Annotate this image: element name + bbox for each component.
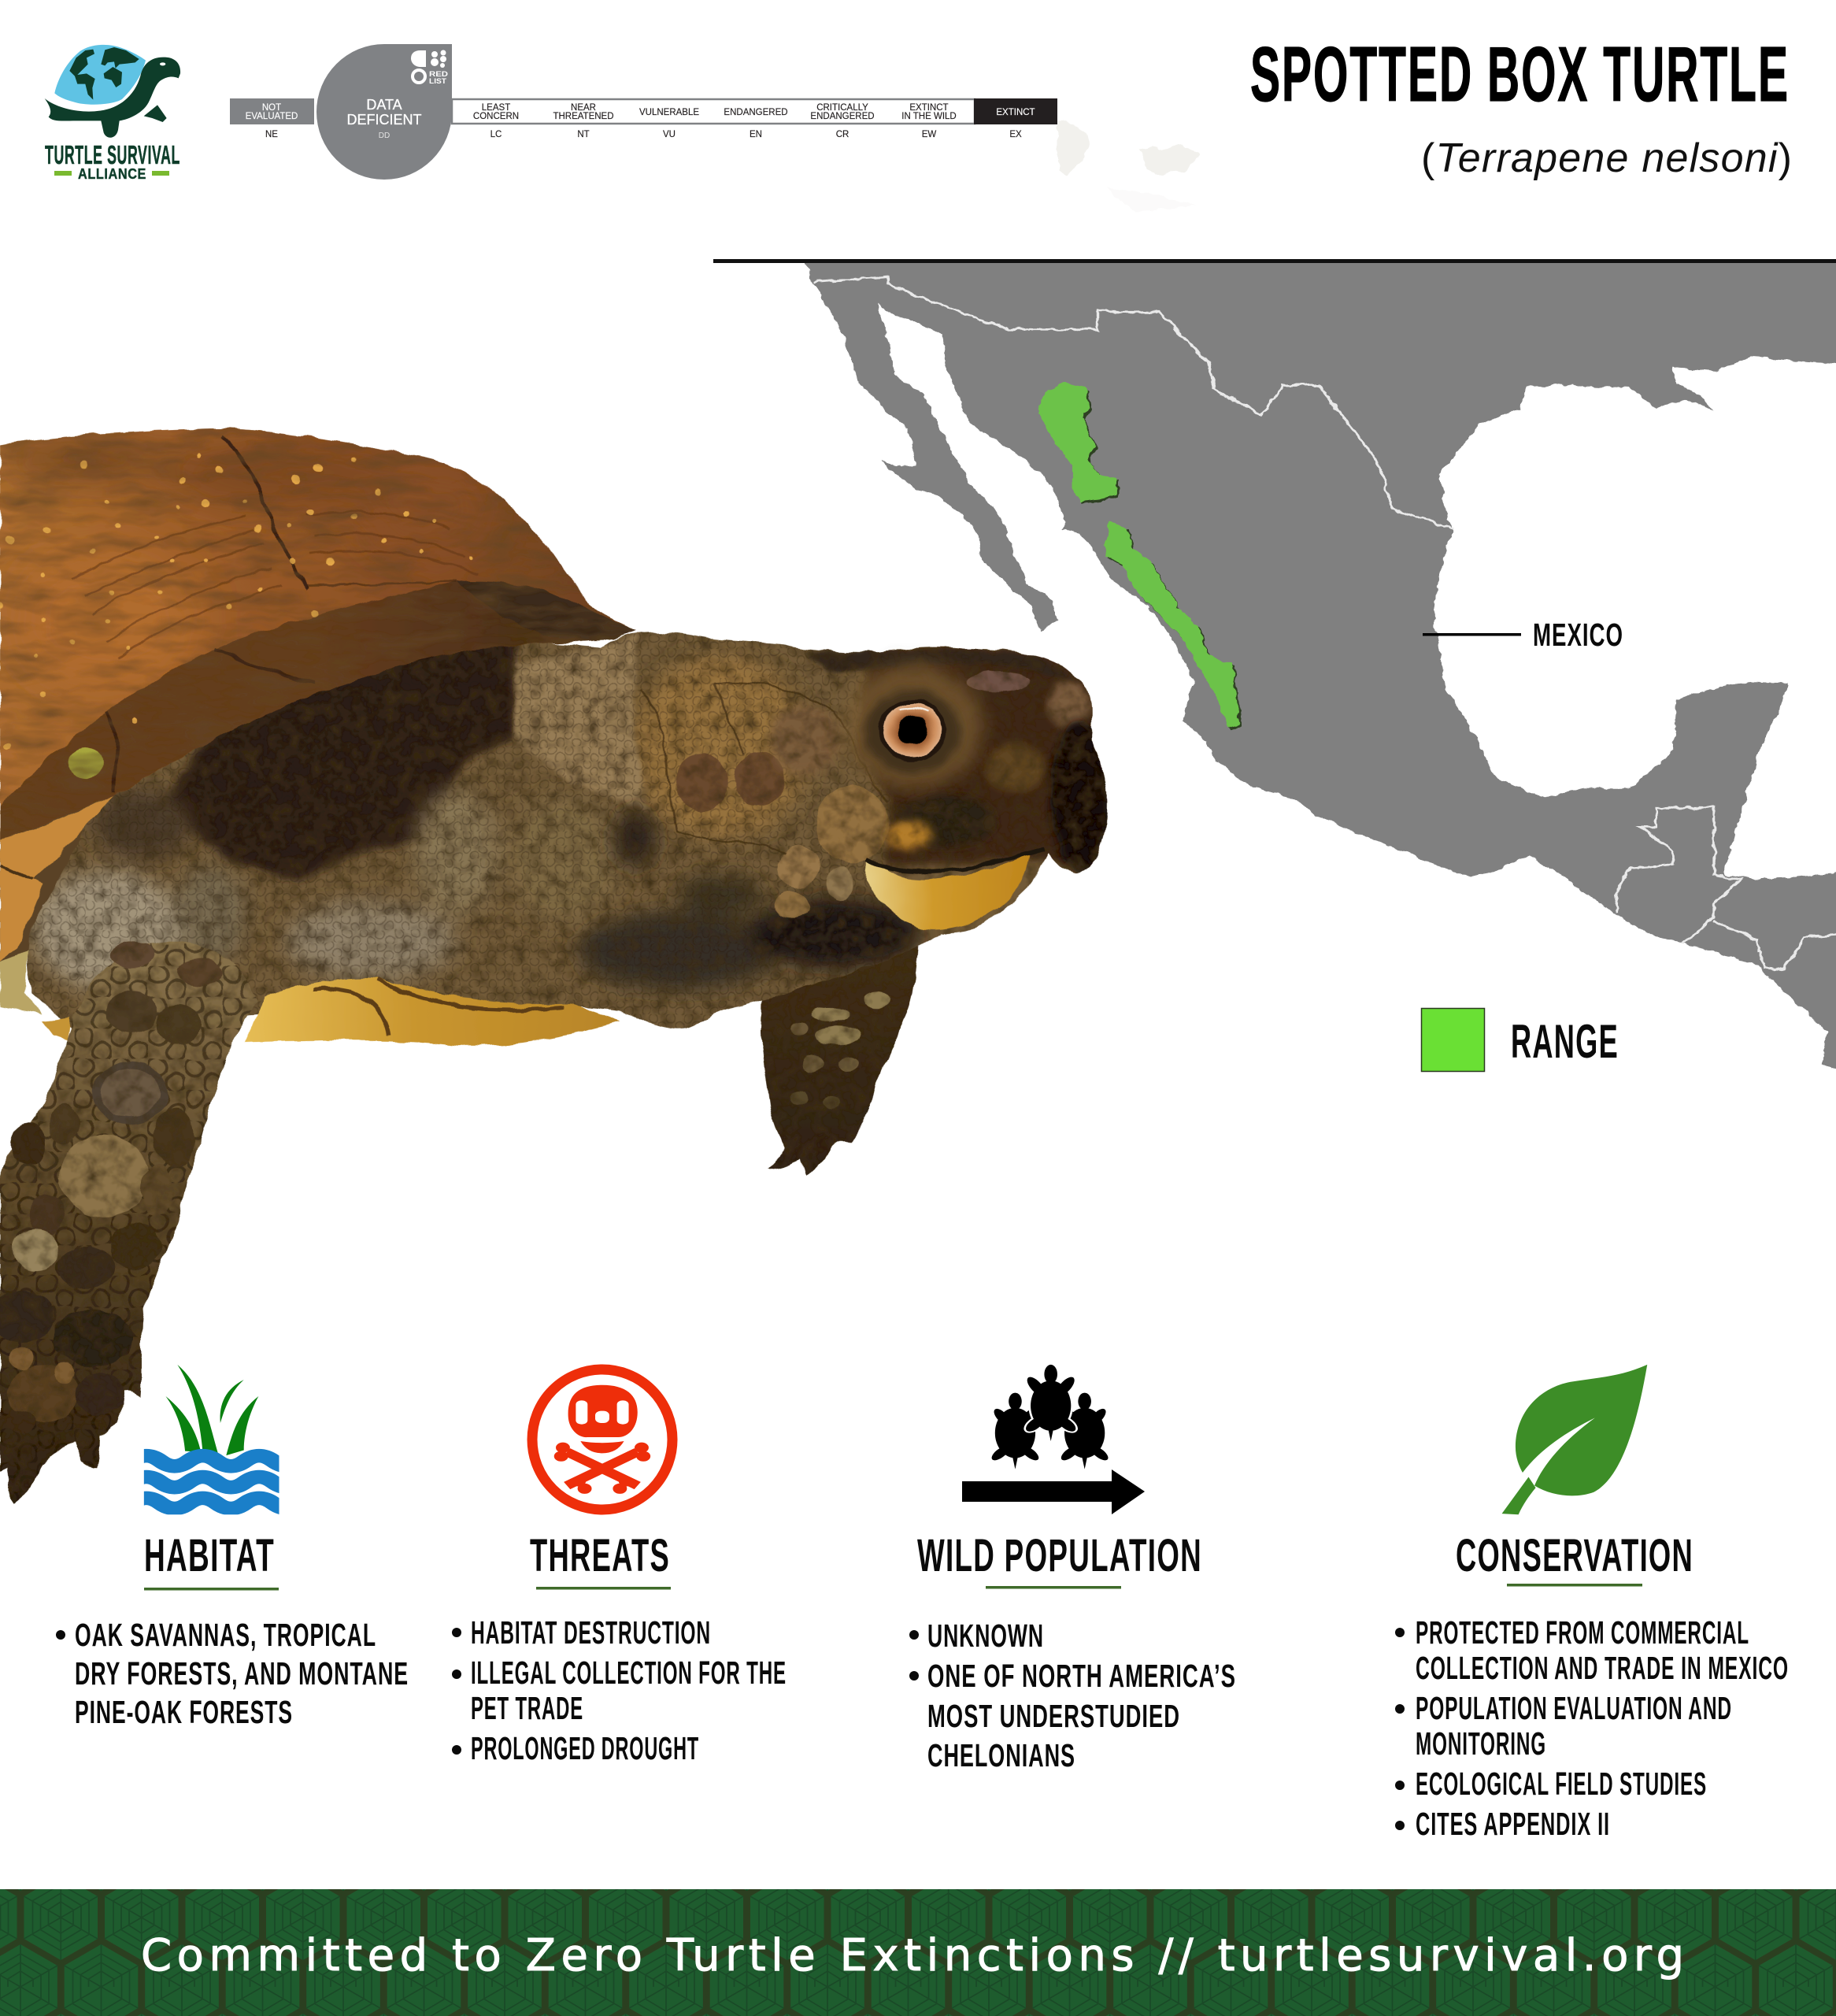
left turtle [989, 1393, 1042, 1469]
red list logo [411, 50, 448, 86]
faint map smudge [1057, 120, 1201, 213]
status: critically endangered: ENDANGERED [810, 112, 875, 121]
status: least concern: LEAST [482, 103, 510, 113]
status: critically endangered: CR [836, 130, 849, 139]
mouth line [866, 849, 1045, 872]
top divider [713, 259, 1836, 263]
shell underside backing [0, 782, 128, 972]
wild population list [909, 1618, 1236, 1773]
logo turtle emblem [45, 45, 180, 138]
habitat list: OAK SAVANNAS, TROPICAL [75, 1617, 376, 1653]
map panel [713, 236, 1836, 1076]
status bar outline [452, 99, 975, 124]
status: data deficient highlighted [316, 44, 452, 180]
scute lines [107, 436, 457, 793]
shell [0, 428, 636, 846]
status: near threatened: NT [577, 130, 590, 139]
turtle illustration [0, 428, 1141, 1506]
status: endangered [724, 108, 788, 139]
status: extinct: EXTINCT [996, 108, 1035, 117]
face [805, 645, 1112, 873]
logo: Turtle Survival Alliance [45, 45, 180, 182]
Mexico callout [1423, 617, 1623, 653]
scientific name: (Terrapene nelsoni) [1421, 135, 1792, 181]
red list logo: RED [429, 70, 448, 79]
shell lip shadow line [0, 865, 32, 879]
status: not evaluated: NE [265, 130, 278, 139]
species range: shaded green areas [1038, 382, 1241, 729]
threats list: PROLONGED DROUGHT [471, 1730, 699, 1766]
neck collar [515, 635, 646, 810]
moss patch [68, 747, 102, 779]
threats list: ILLEGAL COLLECTION FOR THE [471, 1655, 787, 1691]
status: vulnerable [639, 108, 699, 139]
logo wordmark: TURTLE SURVIVAL [45, 140, 180, 169]
panel: wild population [909, 1365, 1236, 1773]
status: extinct in the wild: EW [922, 130, 936, 139]
beak [866, 854, 1031, 930]
status: extinct [974, 98, 1057, 139]
underline [1507, 1584, 1642, 1586]
icon: skull and crossbones [532, 1369, 672, 1510]
status: extinct in the wild: EXTINCT [909, 103, 949, 113]
status: critically endangered [810, 103, 875, 139]
heading: conservation: CONSERVATION [1456, 1530, 1693, 1581]
center turtle outline [1023, 1380, 1079, 1434]
status: near threatened: NEAR [571, 103, 596, 113]
map land [804, 261, 1836, 1076]
status: extinct: EX [1009, 130, 1022, 139]
front arm and foot [0, 941, 264, 1506]
status: endangered: ENDANGERED [724, 108, 788, 117]
icon: grass and water [132, 1365, 302, 1509]
orange lower shell edge [0, 796, 114, 962]
status: data deficient highlighted: DEFICIENT [346, 112, 422, 128]
pale skin patches [32, 656, 809, 990]
status: data deficient highlighted: DD [379, 132, 390, 140]
rear leg [761, 923, 920, 1176]
arm scales [0, 942, 223, 1433]
center turtle [1023, 1365, 1079, 1441]
wild population list: CHELONIANS [927, 1737, 1075, 1773]
eye [842, 664, 983, 788]
heading: wild population: WILD POPULATION [917, 1530, 1202, 1581]
status: data deficient highlighted: DATA [366, 97, 402, 113]
panel: conservation [1395, 1365, 1789, 1842]
status: endangered: EN [750, 130, 762, 139]
skin scale texture [0, 621, 891, 1043]
habitat list [56, 1617, 409, 1730]
threats list: HABITAT DESTRUCTION [471, 1614, 711, 1651]
heading: threats: THREATS [530, 1530, 670, 1581]
dark cavity under shell [164, 635, 515, 880]
status: least concern: LC [490, 130, 502, 139]
conservation list: MONITORING [1416, 1725, 1546, 1762]
IUCN red list status scale [230, 44, 1057, 180]
status: vulnerable: VULNERABLE [639, 108, 699, 117]
growth rings [72, 512, 478, 659]
status: not evaluated: EVALUATED [246, 112, 298, 121]
right turtle [1058, 1393, 1111, 1469]
shell tone patches [0, 438, 492, 691]
icon: leaf [1502, 1365, 1647, 1514]
habitat list: PINE-OAK FORESTS [75, 1694, 293, 1730]
wild population list: UNKNOWN [927, 1618, 1044, 1654]
arm scale texture [0, 944, 264, 1506]
wild population list: ONE OF NORTH AMERICA’S [927, 1658, 1236, 1694]
footer tagline: Committed to Zero Turtle Extinctions // turtlesurvival.org [141, 1930, 1684, 1981]
legend: range [1422, 1008, 1619, 1071]
habitat list: DRY FORESTS, AND MONTANE [75, 1655, 409, 1692]
dark lower neck [578, 810, 920, 990]
conservation list: CITES APPENDIX II [1416, 1806, 1610, 1842]
status: not evaluated: NOT [262, 103, 281, 113]
footer banner [0, 1889, 1836, 2016]
icon: three turtles and arrow [962, 1365, 1145, 1514]
status: near threatened: THREATENED [553, 112, 614, 121]
underline [144, 1588, 279, 1591]
status: extinct in the wild [901, 103, 957, 139]
wild population list: MOST UNDERSTUDIED [927, 1698, 1180, 1734]
status: extinct in the wild: IN THE WILD [901, 112, 957, 121]
logo green bars [54, 171, 169, 176]
shell spots [0, 453, 472, 750]
heading: habitat: HABITAT [144, 1530, 275, 1581]
status: least concern: CONCERN [473, 112, 519, 121]
footer hexagon pattern [0, 1889, 1836, 2016]
logo sub-wordmark: ALLIANCE [78, 166, 146, 182]
threats list: PET TRADE [471, 1690, 583, 1726]
body and neck [27, 632, 1109, 1028]
head scute lines [642, 682, 887, 853]
head scutes [676, 705, 887, 918]
plastron [0, 951, 620, 1046]
status: least concern [473, 103, 519, 139]
shell lower marginal band [0, 581, 636, 846]
status: near threatened [553, 103, 614, 139]
status: vulnerable: VU [663, 130, 676, 139]
top white mask above map [713, 236, 1836, 259]
underline [986, 1586, 1121, 1589]
threats list [452, 1614, 787, 1766]
legend: range: RANGE [1511, 1015, 1619, 1068]
panel: threats [452, 1369, 787, 1766]
underline [536, 1587, 671, 1589]
conservation list [1395, 1614, 1789, 1842]
Mexico callout: MEXICO [1533, 617, 1623, 653]
red list logo: LIST [429, 77, 446, 86]
country borders [814, 277, 1836, 970]
status: critically endangered: CRITICALLY [816, 103, 868, 113]
status: not evaluated [230, 98, 314, 139]
panel: habitat [56, 1365, 409, 1730]
dark rear marginal [457, 581, 636, 640]
